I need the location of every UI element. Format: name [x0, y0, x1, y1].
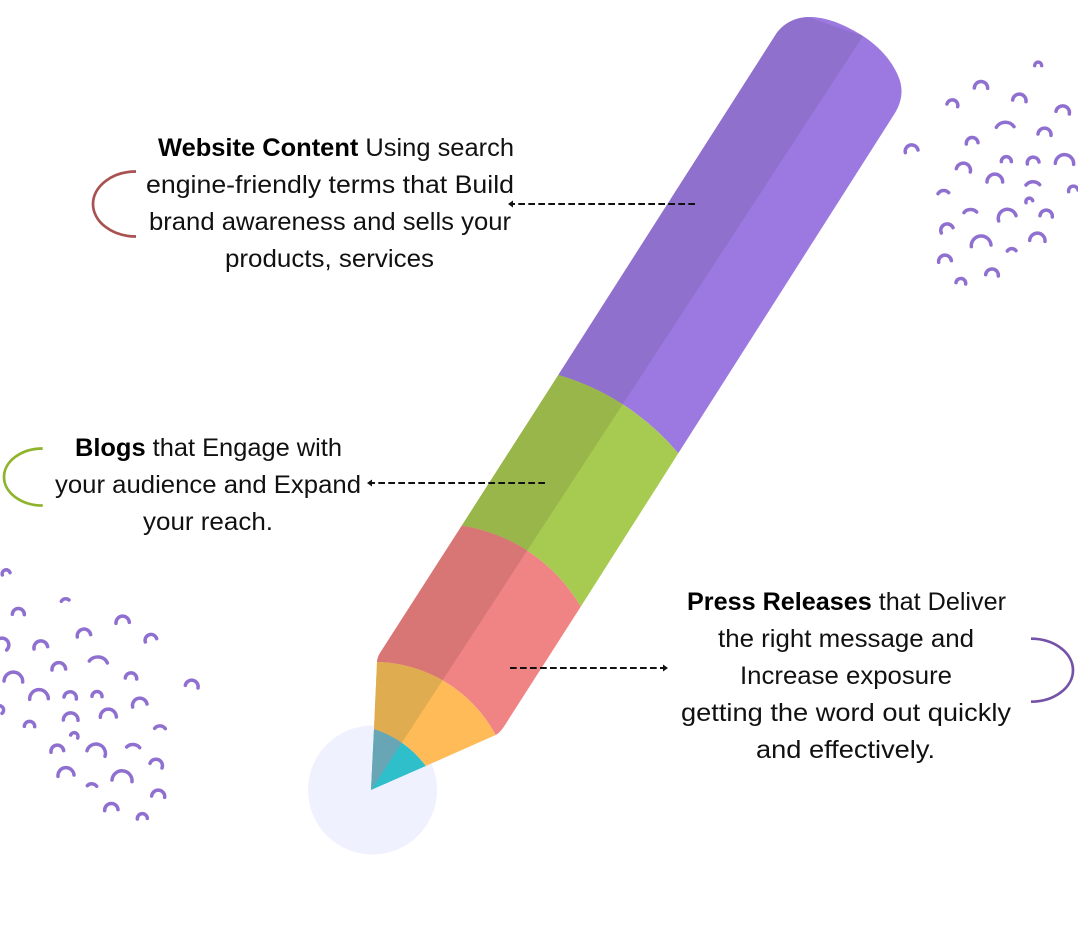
decoration: purple squiggles top right: [905, 62, 1078, 284]
text block: press releases: getting the word out quickly: [681, 699, 1012, 727]
text block: website content: brand awareness and sells your: [149, 208, 511, 236]
pencil section: orange wood: [374, 662, 496, 766]
text block: blogs: Blogs that Engage with: [75, 434, 342, 462]
pencil section: teal tip: [371, 729, 426, 790]
decoration: purple squiggles bottom left: [0, 570, 198, 819]
text block: press releases: Increase exposure: [740, 662, 952, 690]
decorative circle behind pencil tip: [308, 726, 437, 854]
text block: website content: engine-friendly terms that Build: [146, 171, 514, 199]
text block: press releases: [681, 588, 1012, 764]
text block: website content: products, services: [225, 245, 434, 273]
text block: press releases: and effectively.: [756, 736, 935, 764]
text block: website content: [146, 134, 514, 273]
icon: pencil: [371, 17, 902, 790]
text block: press releases: Press Releases that Deliver: [687, 588, 1006, 616]
pencil section: red band: [377, 526, 581, 735]
pencil section: purple body: [558, 17, 902, 453]
text block: press releases: the right message and: [718, 625, 974, 653]
pencil section: green band: [462, 375, 678, 607]
text block: blogs: your audience and Expand: [55, 471, 361, 499]
arrow: purple section to website content: [508, 200, 695, 208]
arrow: red section to press releases: [510, 664, 668, 672]
bracket: press releases: [1031, 639, 1073, 702]
bracket: blogs: [4, 448, 43, 506]
text block: blogs: [55, 434, 361, 536]
text block: blogs: your reach.: [143, 508, 273, 536]
arrow: green section to blogs: [367, 480, 545, 486]
text block: website content: Website Content Using search: [158, 134, 514, 162]
bracket: website content: [93, 172, 136, 236]
